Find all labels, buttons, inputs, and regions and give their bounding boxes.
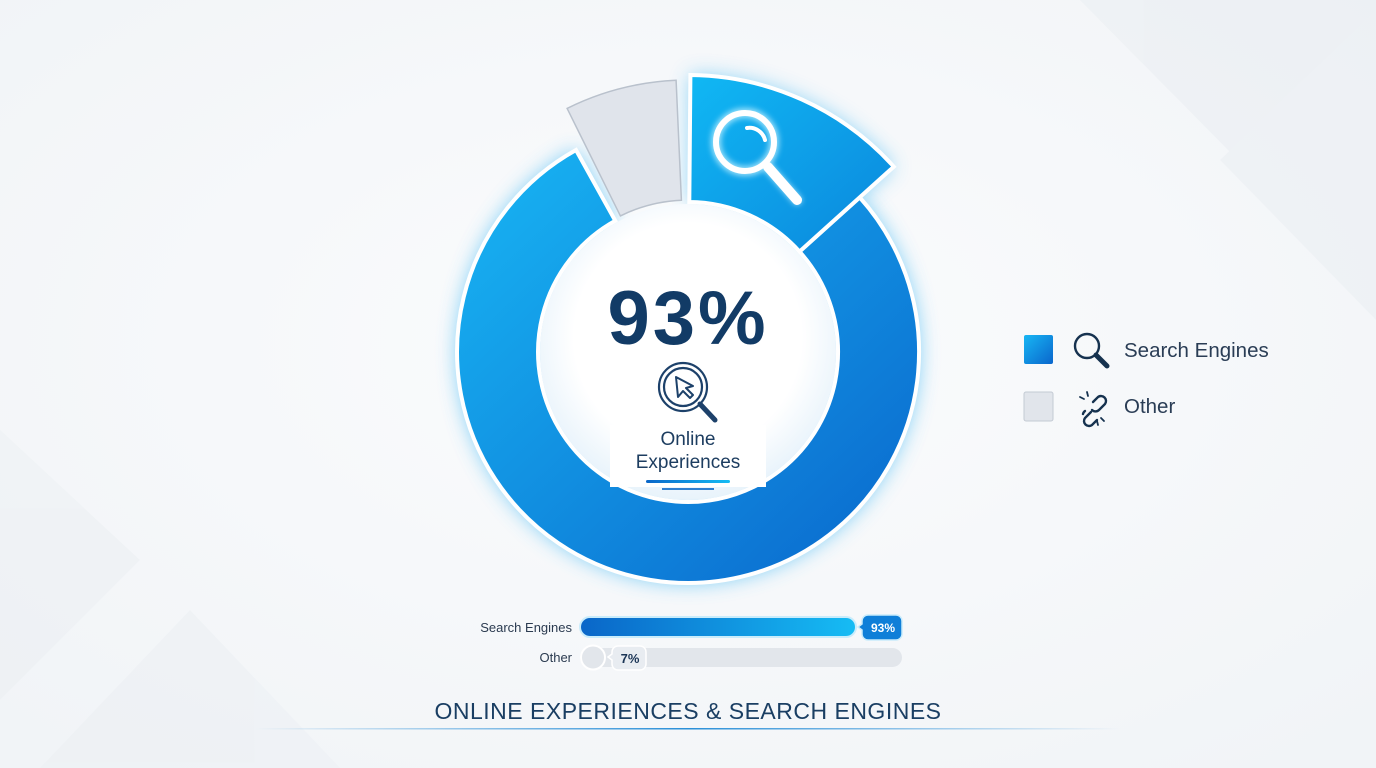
bar chart: Other — [539, 650, 573, 665]
inner circle — [540, 204, 836, 500]
icon: search cursor — [659, 363, 715, 420]
icon: glowing magnifier — [716, 113, 797, 200]
legend — [1024, 334, 1269, 426]
donut: highlighted search segment — [689, 75, 894, 252]
bar chart: Search Engines — [480, 620, 572, 635]
center label: Experiences — [636, 452, 740, 473]
center label: Online — [661, 429, 715, 450]
bar chart: 93% — [871, 621, 895, 635]
bar chart: 7% — [621, 651, 640, 666]
center value: 93% — [607, 276, 769, 361]
donut: grey other segment — [567, 80, 681, 216]
bar chart — [480, 615, 902, 670]
legend: Other — [1124, 395, 1175, 418]
legend: Search Engines — [1124, 339, 1269, 362]
donut: main blue segment — [457, 150, 919, 583]
title: ONLINE EXPERIENCES & SEARCH ENGINES — [434, 698, 942, 724]
center underline — [646, 480, 730, 490]
donut chart — [457, 75, 919, 583]
